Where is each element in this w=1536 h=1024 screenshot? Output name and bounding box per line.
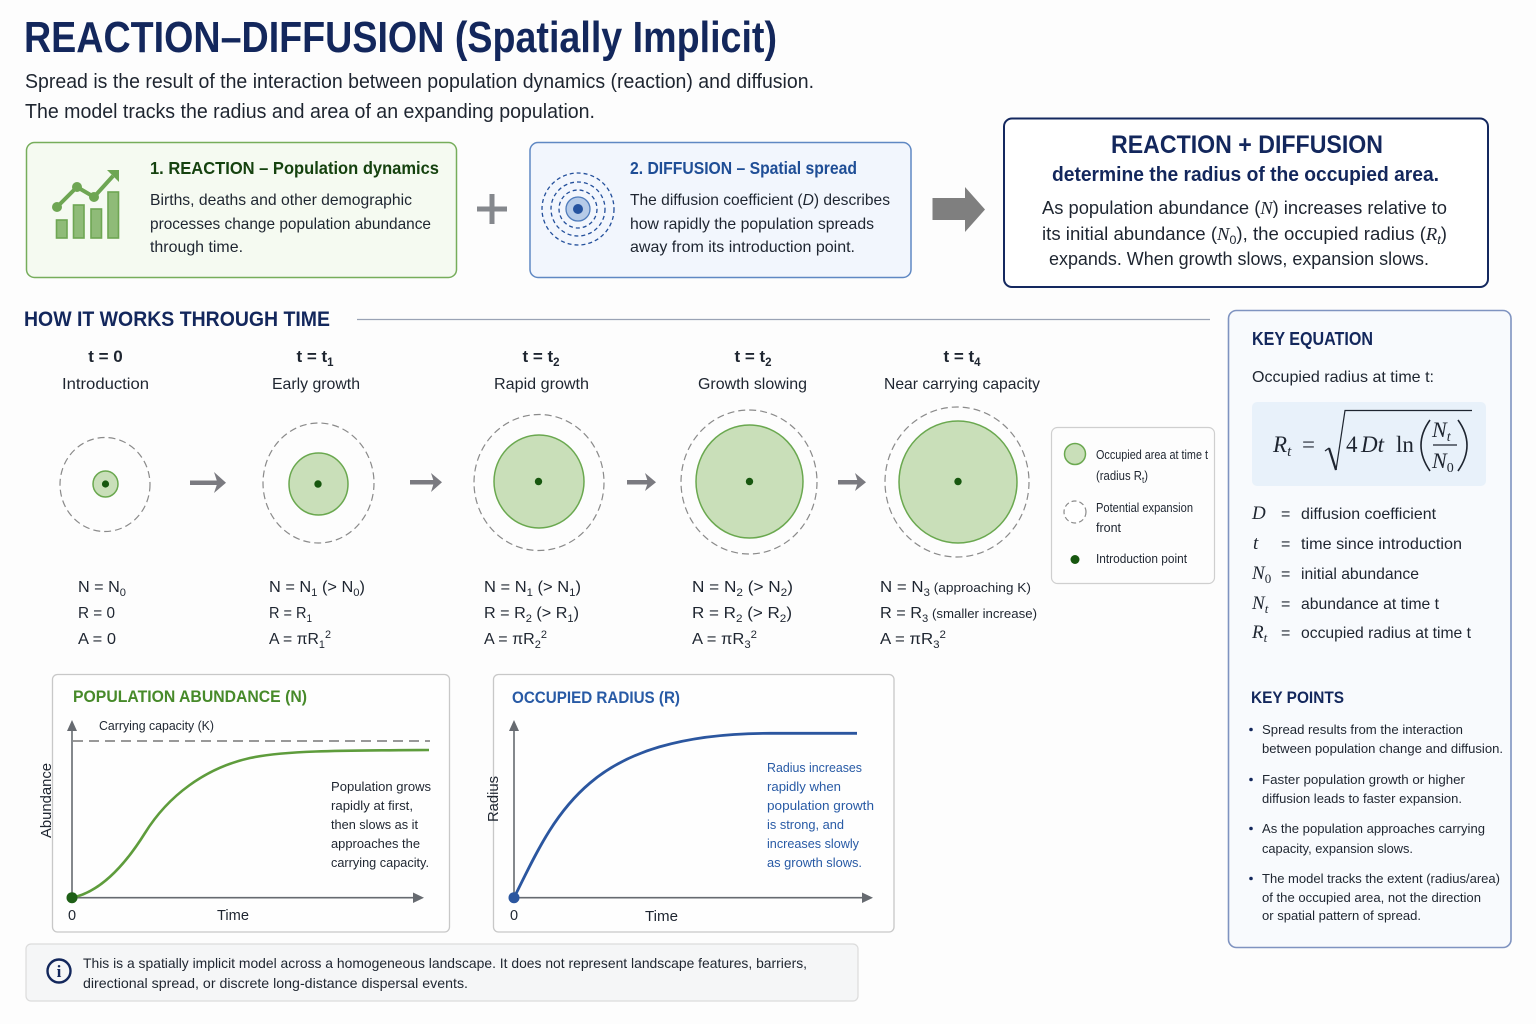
reaction body text [150, 192, 431, 256]
stage: t = t4: Near carrying capacity [884, 376, 1040, 393]
abundance note: approaches the [331, 836, 420, 851]
variable definitions: = [1281, 625, 1290, 642]
stage: t = t2 slowing: R = R [692, 605, 733, 622]
stage: t = t2 rapid: Rapid growth [494, 376, 589, 393]
reaction body text: processes change population abundance [150, 216, 431, 233]
radius note: as growth slows. [767, 855, 862, 870]
stage: t = 0: Introduction [62, 376, 149, 393]
note text [83, 955, 807, 991]
stage: t = t2 rapid: 1 [569, 587, 576, 599]
legend: Occupied area at time t [1096, 448, 1208, 462]
result body text: ) [1441, 224, 1447, 244]
stage: t = t2 rapid: N = N [484, 579, 525, 596]
legend: t [1142, 475, 1145, 485]
stage: t = 0: A = 0 [78, 631, 116, 648]
result body text: 0 [1229, 233, 1237, 247]
stage: t = t1: 1 [319, 639, 325, 651]
result subheading: determine the radius of the occupied area. [1052, 164, 1439, 186]
chart: population abundance: Carrying capacity (K) [99, 718, 214, 733]
panel: result [1004, 118, 1488, 287]
stage: t = t2 rapid: (> N [533, 579, 569, 596]
stage: t = 0: R = 0 [78, 605, 115, 622]
stage: t = t4: A = πR [880, 631, 931, 648]
panel: reaction [26, 142, 456, 278]
radius note: increases slowly [767, 836, 859, 851]
legend: Potential expansion [1096, 501, 1193, 515]
stage: t = t2 slowing: 3 [744, 639, 751, 651]
chart: population abundance: 0 [68, 908, 76, 924]
icon: growth chart [52, 170, 119, 238]
stage: t = t2 slowing: 2 [765, 357, 772, 369]
icon: info: i [57, 962, 62, 981]
abundance note: carrying capacity. [331, 855, 429, 870]
key points list: Spread results from the interaction [1262, 722, 1463, 737]
stage: t = t2 rapid: (> R [532, 605, 567, 622]
equation [1252, 402, 1486, 486]
stage: t = t4 [880, 347, 1040, 651]
stage: t = t2 rapid: t = t [522, 347, 553, 366]
legend: ) [1144, 469, 1148, 483]
result body text: ), the occupied radius ( [1236, 224, 1426, 244]
stage: t = t2 slowing: 2 [736, 587, 743, 599]
key points list: between population change and diffusion. [1262, 741, 1503, 756]
stage: t = t1: N = N [269, 579, 310, 596]
stage: t = t1: ) [360, 579, 365, 596]
subtitle: The model tracks the radius and area of an expanding population. [25, 101, 595, 123]
variable definitions: initial abundance [1301, 566, 1419, 583]
key points list: capacity, expansion slows. [1262, 841, 1413, 856]
stage: t = t4: 3 [923, 587, 930, 599]
icon: plus [477, 194, 507, 224]
stage: t = t2 slowing: 2 [780, 613, 786, 625]
stage: t = 0: t = 0 [88, 347, 123, 366]
arrow: to result [932, 187, 985, 232]
stage: t = t4: (approaching K) [930, 580, 1031, 595]
variable definitions: N [1252, 563, 1265, 584]
result heading: REACTION + DIFFUSION [1111, 131, 1383, 159]
stage: t = t4: 4 [974, 357, 981, 369]
stage: t = t2 rapid: 2 [526, 613, 532, 625]
stage: t = t2 slowing: Growth slowing [698, 376, 807, 393]
chart: occupied radius [486, 674, 894, 932]
arrow: stage 2 to 3 [410, 473, 442, 492]
equation: 4 [1346, 432, 1358, 457]
radius note: rapidly when [767, 779, 841, 794]
variable definitions [1251, 503, 1472, 645]
chart: occupied radius: Radius [486, 776, 502, 822]
reaction body text: through time. [150, 239, 243, 256]
variable definitions: N [1252, 593, 1265, 614]
variable definitions: t [1253, 533, 1259, 554]
stage: t = t2 rapid: 1 [527, 587, 533, 599]
equation: R [1273, 432, 1287, 457]
stage: t = t1: R = R [269, 605, 310, 622]
stage: t = t4: 3 [922, 613, 928, 625]
variable definitions: t [1265, 601, 1269, 616]
note text: This is a spatially implicit model across a homogeneous landscape. It does not represent landscape features, barriers, [83, 955, 807, 971]
stage: t = t4: N = N [880, 579, 921, 596]
stage: t = t1: 0 [353, 587, 360, 599]
key points list: or spatial pattern of spread. [1262, 908, 1421, 923]
chart title: radius: OCCUPIED RADIUS (R) [512, 689, 680, 707]
abundance note: then slows as it [331, 817, 418, 832]
note text: directional spread, or discrete long-distance dispersal events. [83, 975, 468, 991]
stage: t = t2 slowing: 2 [751, 629, 757, 641]
diffusion body text: how rapidly the population spreads [630, 216, 874, 233]
stage: t = t2 slowing: (> R [742, 605, 780, 622]
variable definitions: t [1264, 630, 1268, 645]
title: REACTION–DIFFUSION (Spatially Implicit) [24, 14, 777, 62]
equation: ln [1396, 432, 1414, 457]
stage: t = t1 [263, 347, 374, 651]
variable definitions: D [1251, 503, 1266, 524]
section heading: HOW IT WORKS THROUGH TIME [24, 308, 330, 331]
stage: t = t2 slowing: ) [786, 605, 792, 622]
chart title: abundance: POPULATION ABUNDANCE (N) [73, 688, 307, 706]
result body text: R [1425, 224, 1437, 244]
stage: t = t4: t = t [943, 347, 974, 366]
stage: t = t2 slowing: 2 [736, 613, 742, 625]
reaction body text: Births, deaths and other demographic [150, 192, 412, 209]
stage: t = t2 slowing: t = t [734, 347, 765, 366]
stage: t = t2 slowing: A = πR [692, 631, 743, 648]
stage: t = t4: 3 [933, 639, 940, 651]
key points list: of the occupied area, not the direction [1262, 890, 1481, 905]
variable definitions: = [1281, 536, 1290, 553]
chart: occupied radius: Time [645, 909, 678, 925]
subtitle [25, 71, 814, 123]
chart: population abundance: Abundance [39, 763, 55, 838]
abundance note [331, 779, 431, 870]
abundance note: rapidly at first, [331, 798, 413, 813]
radius note: is strong, and [767, 817, 844, 832]
stage: t = t1: (> N [317, 579, 353, 596]
key points list: The model tracks the extent (radius/area) [1262, 871, 1500, 886]
radius curve [514, 733, 857, 898]
variable definitions: time since introduction [1301, 536, 1462, 553]
stage: t = t2 slowing: ) [787, 579, 793, 596]
stage: t = t1: A = πR [269, 631, 320, 648]
equation: N [1432, 417, 1447, 442]
equation: 0 [1447, 461, 1454, 476]
variable definitions: abundance at time t [1301, 596, 1440, 613]
legend: front [1096, 521, 1122, 535]
result body text: t [1437, 233, 1441, 247]
equation: t [1447, 430, 1452, 445]
equation: N [1432, 448, 1447, 473]
abundance note: Population grows [331, 779, 431, 794]
stage: t = t2 rapid: 2 [541, 629, 547, 641]
diffusion body text [630, 192, 890, 256]
legend: Introduction point [1096, 552, 1187, 566]
variable definitions: R [1252, 622, 1264, 643]
radius note: population growth [767, 798, 874, 813]
chart: occupied radius: 0 [510, 908, 518, 924]
equation caption: Occupied radius at time t: [1252, 369, 1434, 386]
heading: key points: KEY POINTS [1251, 688, 1344, 707]
icon: concentric spread [542, 173, 614, 245]
key points list: As the population approaches carrying [1262, 821, 1485, 836]
variable definitions: 0 [1265, 571, 1271, 586]
stage: t = t1: 1 [311, 587, 317, 599]
stage: t = t2 rapid: A = πR [484, 631, 535, 648]
reaction heading: 1. REACTION – Population dynamics [150, 158, 439, 178]
key points list: diffusion leads to faster expansion. [1262, 791, 1462, 806]
panel: diffusion [530, 142, 911, 278]
arrow: stage 3 to 4 [627, 473, 656, 491]
stage: t = t1: 2 [325, 629, 331, 641]
arrow: stage 4 to 5 [838, 473, 866, 491]
stage: t = t4: R = R [880, 605, 921, 622]
stage: t = t1: Early growth [272, 376, 360, 393]
stage: t = t1: t = t [296, 347, 327, 366]
diffusion body text: The diffusion coefficient (D) describes [630, 192, 890, 209]
result body text: expands. When growth slows, expansion slows. [1049, 249, 1429, 269]
stage: t = t2 rapid [474, 347, 604, 651]
diffusion body text: away from its introduction point. [630, 239, 855, 256]
variable definitions: diffusion coefficient [1301, 506, 1437, 523]
diffusion heading: 2. DIFFUSION – Spatial spread [630, 158, 857, 178]
chart: population abundance: Time [217, 908, 249, 924]
subtitle: Spread is the result of the interaction between population dynamics (reaction) and diffusion. [25, 71, 814, 93]
variable definitions: = [1281, 506, 1290, 523]
stage: t = t2 rapid: 2 [535, 639, 541, 651]
key points list [1249, 722, 1503, 923]
heading: key equation: KEY EQUATION [1252, 328, 1373, 349]
result body text [1042, 198, 1447, 269]
callout: model note [26, 944, 858, 1001]
stage: t = 0 [60, 347, 150, 648]
stage: t = t4: (smaller increase) [928, 606, 1037, 621]
equation: Dt [1360, 432, 1385, 457]
legend [1052, 428, 1214, 584]
stage: t = t4: 2 [940, 629, 946, 641]
legend: (radius R [1096, 469, 1147, 483]
stage: t = t2 slowing [681, 347, 817, 651]
stage: t = 0: N = N [78, 579, 119, 596]
variable definitions: = [1281, 566, 1290, 583]
variable definitions: = [1281, 596, 1290, 613]
stage: t = t1: 1 [306, 613, 312, 625]
icon: info [48, 960, 70, 982]
stage: t = t2 rapid: 1 [567, 613, 574, 625]
stage: t = 0: 0 [120, 587, 126, 599]
stage: t = t2 slowing: N = N [692, 579, 733, 596]
stage: t = t2 rapid: R = R [484, 605, 525, 622]
stage: t = t2 rapid: 2 [553, 357, 560, 369]
stage: t = t2 slowing: (> N [743, 579, 781, 596]
chart: population abundance [39, 674, 450, 932]
result body text: its initial abundance ( N [1042, 224, 1229, 244]
stage: t = t2 rapid: ) [576, 579, 581, 596]
radius note [767, 760, 874, 870]
arrow: stage 1 to 2 [190, 472, 226, 493]
result body text: As population abundance (N) increases relative to [1042, 198, 1447, 218]
variable definitions: occupied radius at time t [1301, 625, 1472, 642]
key points list: Faster population growth or higher [1262, 772, 1466, 787]
abundance curve [72, 750, 429, 898]
stage: t = t2 rapid: ) [574, 605, 579, 622]
radius note: Radius increases [767, 760, 862, 775]
equation: t [1287, 444, 1292, 460]
equation: = [1302, 432, 1315, 457]
panel: key equation and key points [1228, 310, 1511, 948]
stage: t = t1: 1 [327, 357, 334, 369]
stage: t = t2 slowing: 2 [781, 587, 787, 599]
